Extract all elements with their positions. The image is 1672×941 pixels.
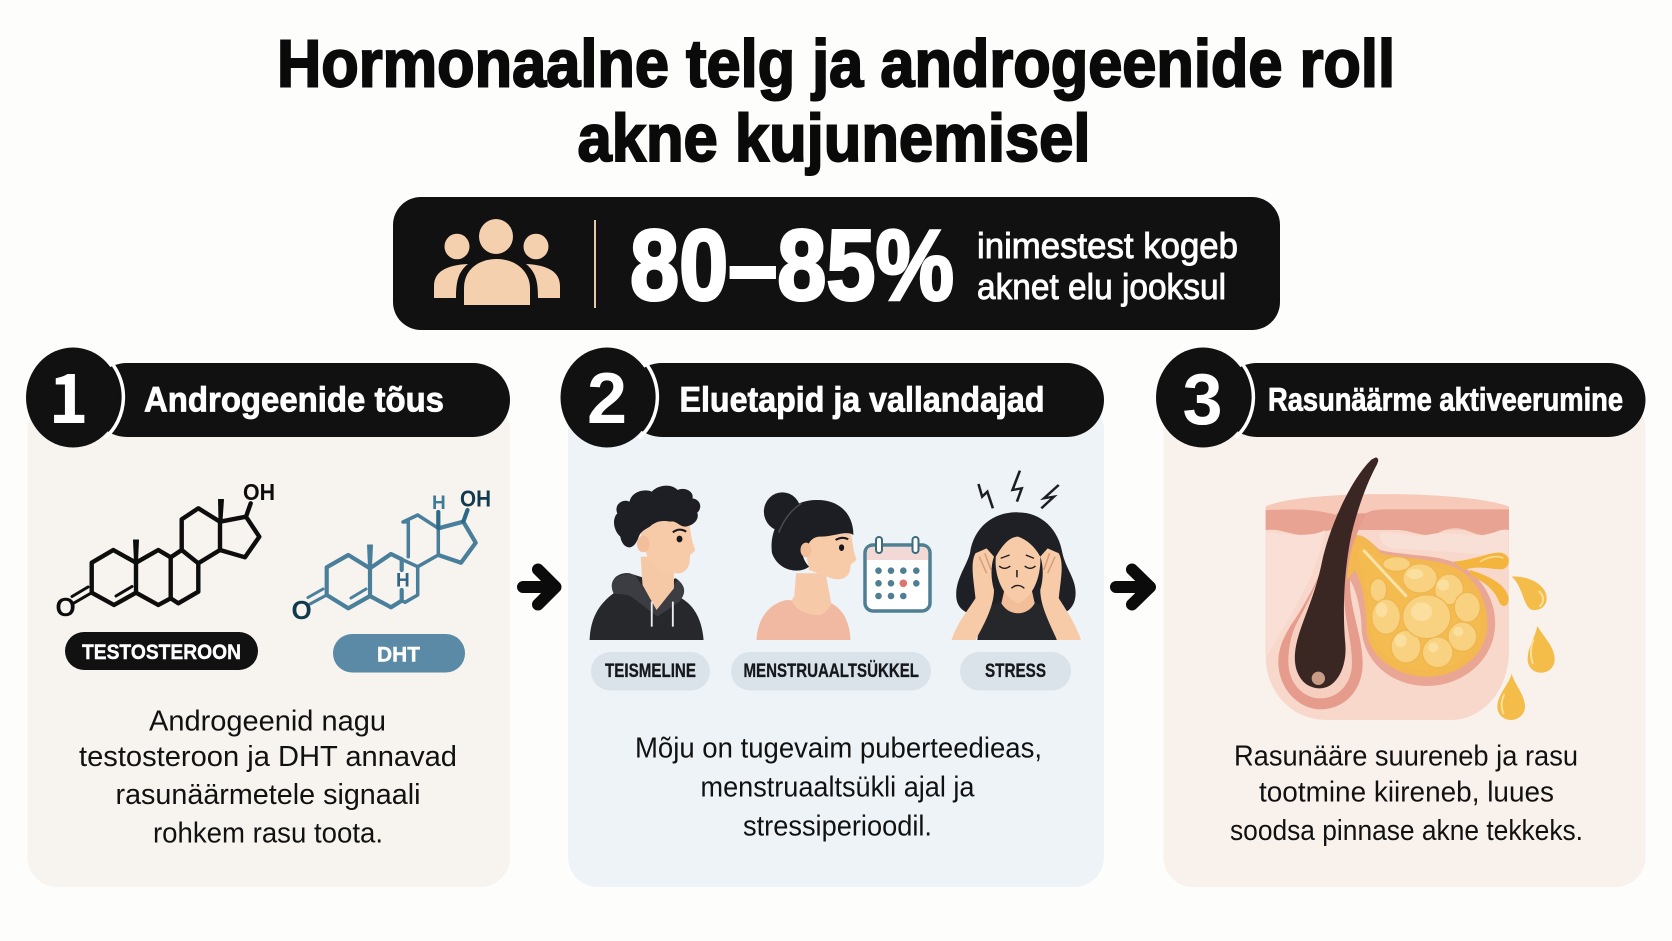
step 3 text: soodsa pinnase akne tekkeks. [1230,815,1583,847]
chart: testosterone molecule [56,479,275,622]
step 1 number badge [26,344,120,448]
panel: step 3 sebaceous gland [1156,348,1646,887]
step 2 text [635,732,1042,842]
stat banner [393,197,1280,330]
step 2 text: menstruaaltsükli ajal ja [700,772,975,804]
skin block [1266,494,1509,720]
chart: DHT molecule: O [292,595,312,625]
step 2 heading: Eluetapid ja vallandajad [680,380,1044,420]
label: testosteroon [65,632,258,670]
step 3 text: tootmine kiireneb, luues [1259,776,1554,808]
chart: testosterone molecule: O [56,592,76,622]
stat caption [977,225,1238,307]
label: menstruaaltsükkel [731,652,931,690]
step 1 text: rohkem rasu toota. [153,818,383,850]
label: stress [960,652,1071,690]
label: DHT: DHT [377,644,420,666]
chart: testosterone molecule: OH [243,479,275,505]
label: testosteroon: TESTOSTEROON [82,641,241,664]
gland capsule [1349,535,1495,686]
oil droplets [1497,576,1555,720]
arrow: step 1 to 2 [523,570,556,604]
step 2 number badge [560,348,654,448]
step 3 header bar [1220,363,1646,437]
icon: woman with bun [756,492,856,640]
icon: stressed person [951,471,1081,640]
label: menstruaaltsükkel: MENSTRUAALTSÜKKEL [744,661,919,682]
step 1 text [79,706,457,850]
illustration: hair follicle and gland [1266,457,1555,720]
step 1 text: Androgeenid nagu [149,706,386,738]
step 3 number badge [1156,348,1250,448]
chart: DHT molecule: H [396,570,410,592]
label: stress: STRESS [985,661,1046,682]
arrow: step 2 to 3 [1116,570,1150,604]
title [277,26,1395,176]
step 3 heading: Rasunäärme aktiveerumine [1268,382,1623,418]
step 2 text: stressiperioodil. [743,810,932,842]
icon: calendar [865,537,930,611]
chart: DHT molecule: H [432,493,446,514]
step 1 text: rasunäärmetele signaali [116,779,420,811]
step 1 heading: Androgeenide tõus [144,380,444,420]
step 2 header bar [625,363,1104,437]
icon: group of people [434,219,560,305]
step 1 text: testosteroon ja DHT annavad [79,741,457,773]
title: Hormonaalne telg ja androgeenide roll [277,26,1395,102]
chart: DHT molecule [292,486,491,625]
chart: DHT molecule: OH [460,486,491,512]
step 1 header bar [90,363,510,437]
step 3 text [1230,740,1583,847]
label: teismeline: TEISMELINE [605,661,696,682]
stat caption: inimestest kogeb [977,225,1238,266]
step 2 number badge: 2 [587,359,627,439]
panel: step 1 androgens [26,344,510,887]
step 3 number badge: 3 [1182,360,1223,440]
stat caption: aknet elu jooksul [977,266,1226,307]
big number: 80–85% [630,210,954,322]
step 3 text: Rasunääre suureneb ja rasu [1234,740,1578,772]
hair shaft [1295,457,1378,688]
follicle sheath [1278,513,1367,709]
panel: step 2 life stages [560,348,1104,887]
step 2 text: Mõju on tugevaim puberteedieas, [635,732,1042,764]
label: DHT [333,634,465,672]
title: akne kujunemisel [578,101,1090,176]
icon: teenager [590,486,704,640]
label: teismeline [591,652,710,690]
splash [1453,553,1509,570]
lobules [1370,557,1480,668]
step 1 number badge: 1 [48,344,89,443]
